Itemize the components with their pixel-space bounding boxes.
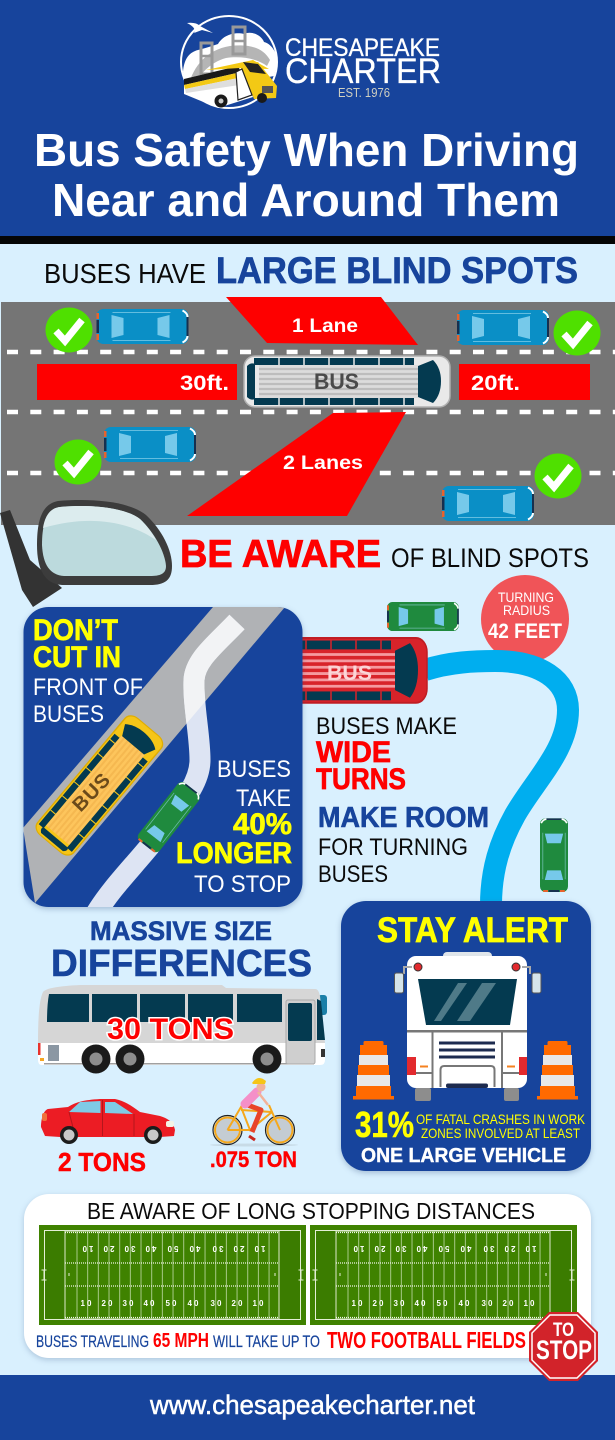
football field right [310,1225,577,1325]
red car side view [41,1099,175,1144]
text: front of buses [33,674,143,728]
blind spot: 30ft behind [37,364,237,400]
gray road [23,607,285,915]
football field right: 50 [437,1299,449,1308]
blind spot: 1 lane: 1 Lane [292,316,358,337]
heading: stay alert: STAY ALERT [377,911,568,950]
heading: massive size differences [51,916,312,985]
football field right: 10 [524,1244,536,1253]
text: 65 mph two football fields: WILL TAKE UP TO [213,1332,320,1351]
text: 65 mph two football fields: TWO FOOTBALL FIELDS [327,1327,526,1353]
icon: stop sign: TO [553,1320,574,1341]
football field right: 20 [503,1299,515,1308]
logo wordmark: CHESAPEAKE [285,34,440,62]
green car [136,780,202,854]
title: Bus Safety When Driving [34,124,579,176]
football field left [39,1225,306,1325]
football field right: 10 [352,1299,364,1308]
school bus [33,712,166,859]
callout: turning radius: TURNING [498,589,554,605]
football field left: 20 [102,1244,114,1253]
stat: 31%: ZONES INVOLVED AT LEAST [421,1125,580,1141]
football field left: 20 [232,1299,244,1308]
callout: turning radius: 42 FEET [488,620,562,643]
panel: stopping distances [24,1194,591,1358]
football field left: 20 [102,1299,114,1308]
text: make room: FOR TURNING [318,834,468,861]
panel: road blind spot diagram [1,297,615,525]
text: don't cut in: CUT IN [33,641,121,674]
text: 65 mph two football fields [36,1327,526,1353]
coach bus side view: 30 TONS [107,1013,234,1046]
football field left: 40 [144,1244,156,1253]
heading: massive size differences: MASSIVE SIZE [90,916,272,946]
heading: large blind spots: BUSES HAVE [44,258,206,289]
text: 40% longer to stop: 40% [233,808,292,841]
football field left: 50 [166,1244,178,1253]
text: wide turns: WIDE [316,736,391,769]
heading: large blind spots: LARGE BLIND SPOTS [216,250,578,291]
traffic cones [353,1041,578,1100]
text: 40% longer to stop [176,756,292,898]
icon: stop sign: STOP [536,1335,592,1365]
heading: massive size differences: DIFFERENCES [51,943,312,985]
text: make room [318,802,489,888]
football field right: 10 [352,1244,364,1253]
text: wide turns: BUSES MAKE [316,713,457,740]
football field left: 40 [144,1299,156,1308]
football field left: 30 [211,1299,223,1308]
football field left: 40 [188,1244,200,1253]
icon: side mirror [0,500,172,607]
school bus: BUS [68,769,116,816]
text: don't cut in: DON’T [33,614,118,647]
football field right: 20 [373,1244,385,1253]
label: 2 tons: 2 TONS [58,1147,146,1177]
panel: don't cut in [23,607,302,915]
text: front of buses: BUSES [33,701,104,728]
red bus turning: BUS [327,662,372,685]
footer [0,1375,615,1440]
football field right: 30 [482,1299,494,1308]
text: front of buses: FRONT OF [33,674,143,701]
football field right: 10 [524,1299,536,1308]
text: 65 mph two football fields: 65 MPH [153,1330,209,1352]
blind spot: 20ft ahead: 20ft. [471,372,520,395]
football field left: 10 [81,1244,93,1253]
stat: 31%: OF FATAL CRASHES IN WORK [416,1111,586,1127]
text: 65 mph two football fields: BUSES TRAVELING [36,1332,149,1351]
text: wide turns: TURNS [316,763,406,796]
header band [0,0,615,244]
football field left: 20 [232,1244,244,1253]
text: 40% longer to stop: BUSES [217,756,291,783]
text: one large vehicle: ONE LARGE VEHICLE [361,1145,566,1167]
football field right: 30 [394,1244,406,1253]
football field right: 40 [415,1299,427,1308]
football field right: 40 [415,1244,427,1253]
heading: be aware: BE AWARE [180,533,381,576]
logo wordmark [285,34,441,100]
football field right: 40 [459,1299,471,1308]
text: wide turns [316,713,457,796]
football field left: 30 [211,1244,223,1253]
football field right: 40 [459,1244,471,1253]
blind spot: 30ft behind: 30ft. [180,372,229,395]
heading: large blind spots [44,250,578,291]
blind spot: 20ft ahead [459,364,590,400]
text: 40% longer to stop: TO STOP [194,871,291,898]
heading: be aware: OF BLIND SPOTS [391,543,589,573]
coach bus side view [38,985,327,1074]
blind spot: 1 lane [226,297,418,345]
turning path arrow [425,661,568,905]
text: 40% longer to stop: LONGER [176,837,292,870]
heading: stopping distances: BE AWARE OF LONG STOPPING DISTANCES [87,1198,535,1224]
gray bus top view: BUS [314,369,359,394]
title [34,124,579,226]
football field left: 40 [188,1299,200,1308]
panel: stay alert [341,901,591,1171]
football field left: 30 [123,1244,135,1253]
bus front [394,952,541,1101]
blind spot: 2 lanes [187,412,406,516]
logo wordmark: EST. 1976 [338,86,390,100]
football field right: 30 [482,1244,494,1253]
football field right: 30 [394,1299,406,1308]
logo wordmark: CHARTER [285,52,441,91]
icon: cyclist [210,1078,298,1146]
green car turning [540,818,568,892]
blind spot: 2 lanes: 2 Lanes [283,453,363,474]
title: Near and Around Them [52,174,560,226]
label: .075 ton: .075 TON [210,1147,297,1172]
text: 40% longer to stop: TAKE [236,785,291,812]
football field left: 50 [166,1299,178,1308]
red bus turning [221,638,427,703]
football field left: 10 [253,1244,265,1253]
text: make room: MAKE ROOM [318,802,489,834]
stat: 31%: 31% [355,1104,414,1145]
heading: be aware [180,533,589,576]
callout: turning radius [481,575,569,663]
logo emblem [181,16,277,108]
football field right: 20 [373,1299,385,1308]
gray bus top view [244,356,450,407]
blue cars [96,309,549,521]
text: make room: BUSES [318,861,388,888]
green car top [387,602,459,631]
callout: turning radius: RADIUS [503,602,550,618]
safe zone check marks [46,308,600,498]
football field left: 30 [123,1299,135,1308]
text: don't cut in [33,614,121,674]
stat: 31% [355,1104,586,1145]
footer: www.chesapeakecharter.net [149,1390,475,1420]
football field left: 10 [81,1299,93,1308]
football field right: 20 [503,1244,515,1253]
football field right: 50 [437,1244,449,1253]
football field left: 10 [253,1299,265,1308]
icon: stop sign [529,1312,598,1381]
